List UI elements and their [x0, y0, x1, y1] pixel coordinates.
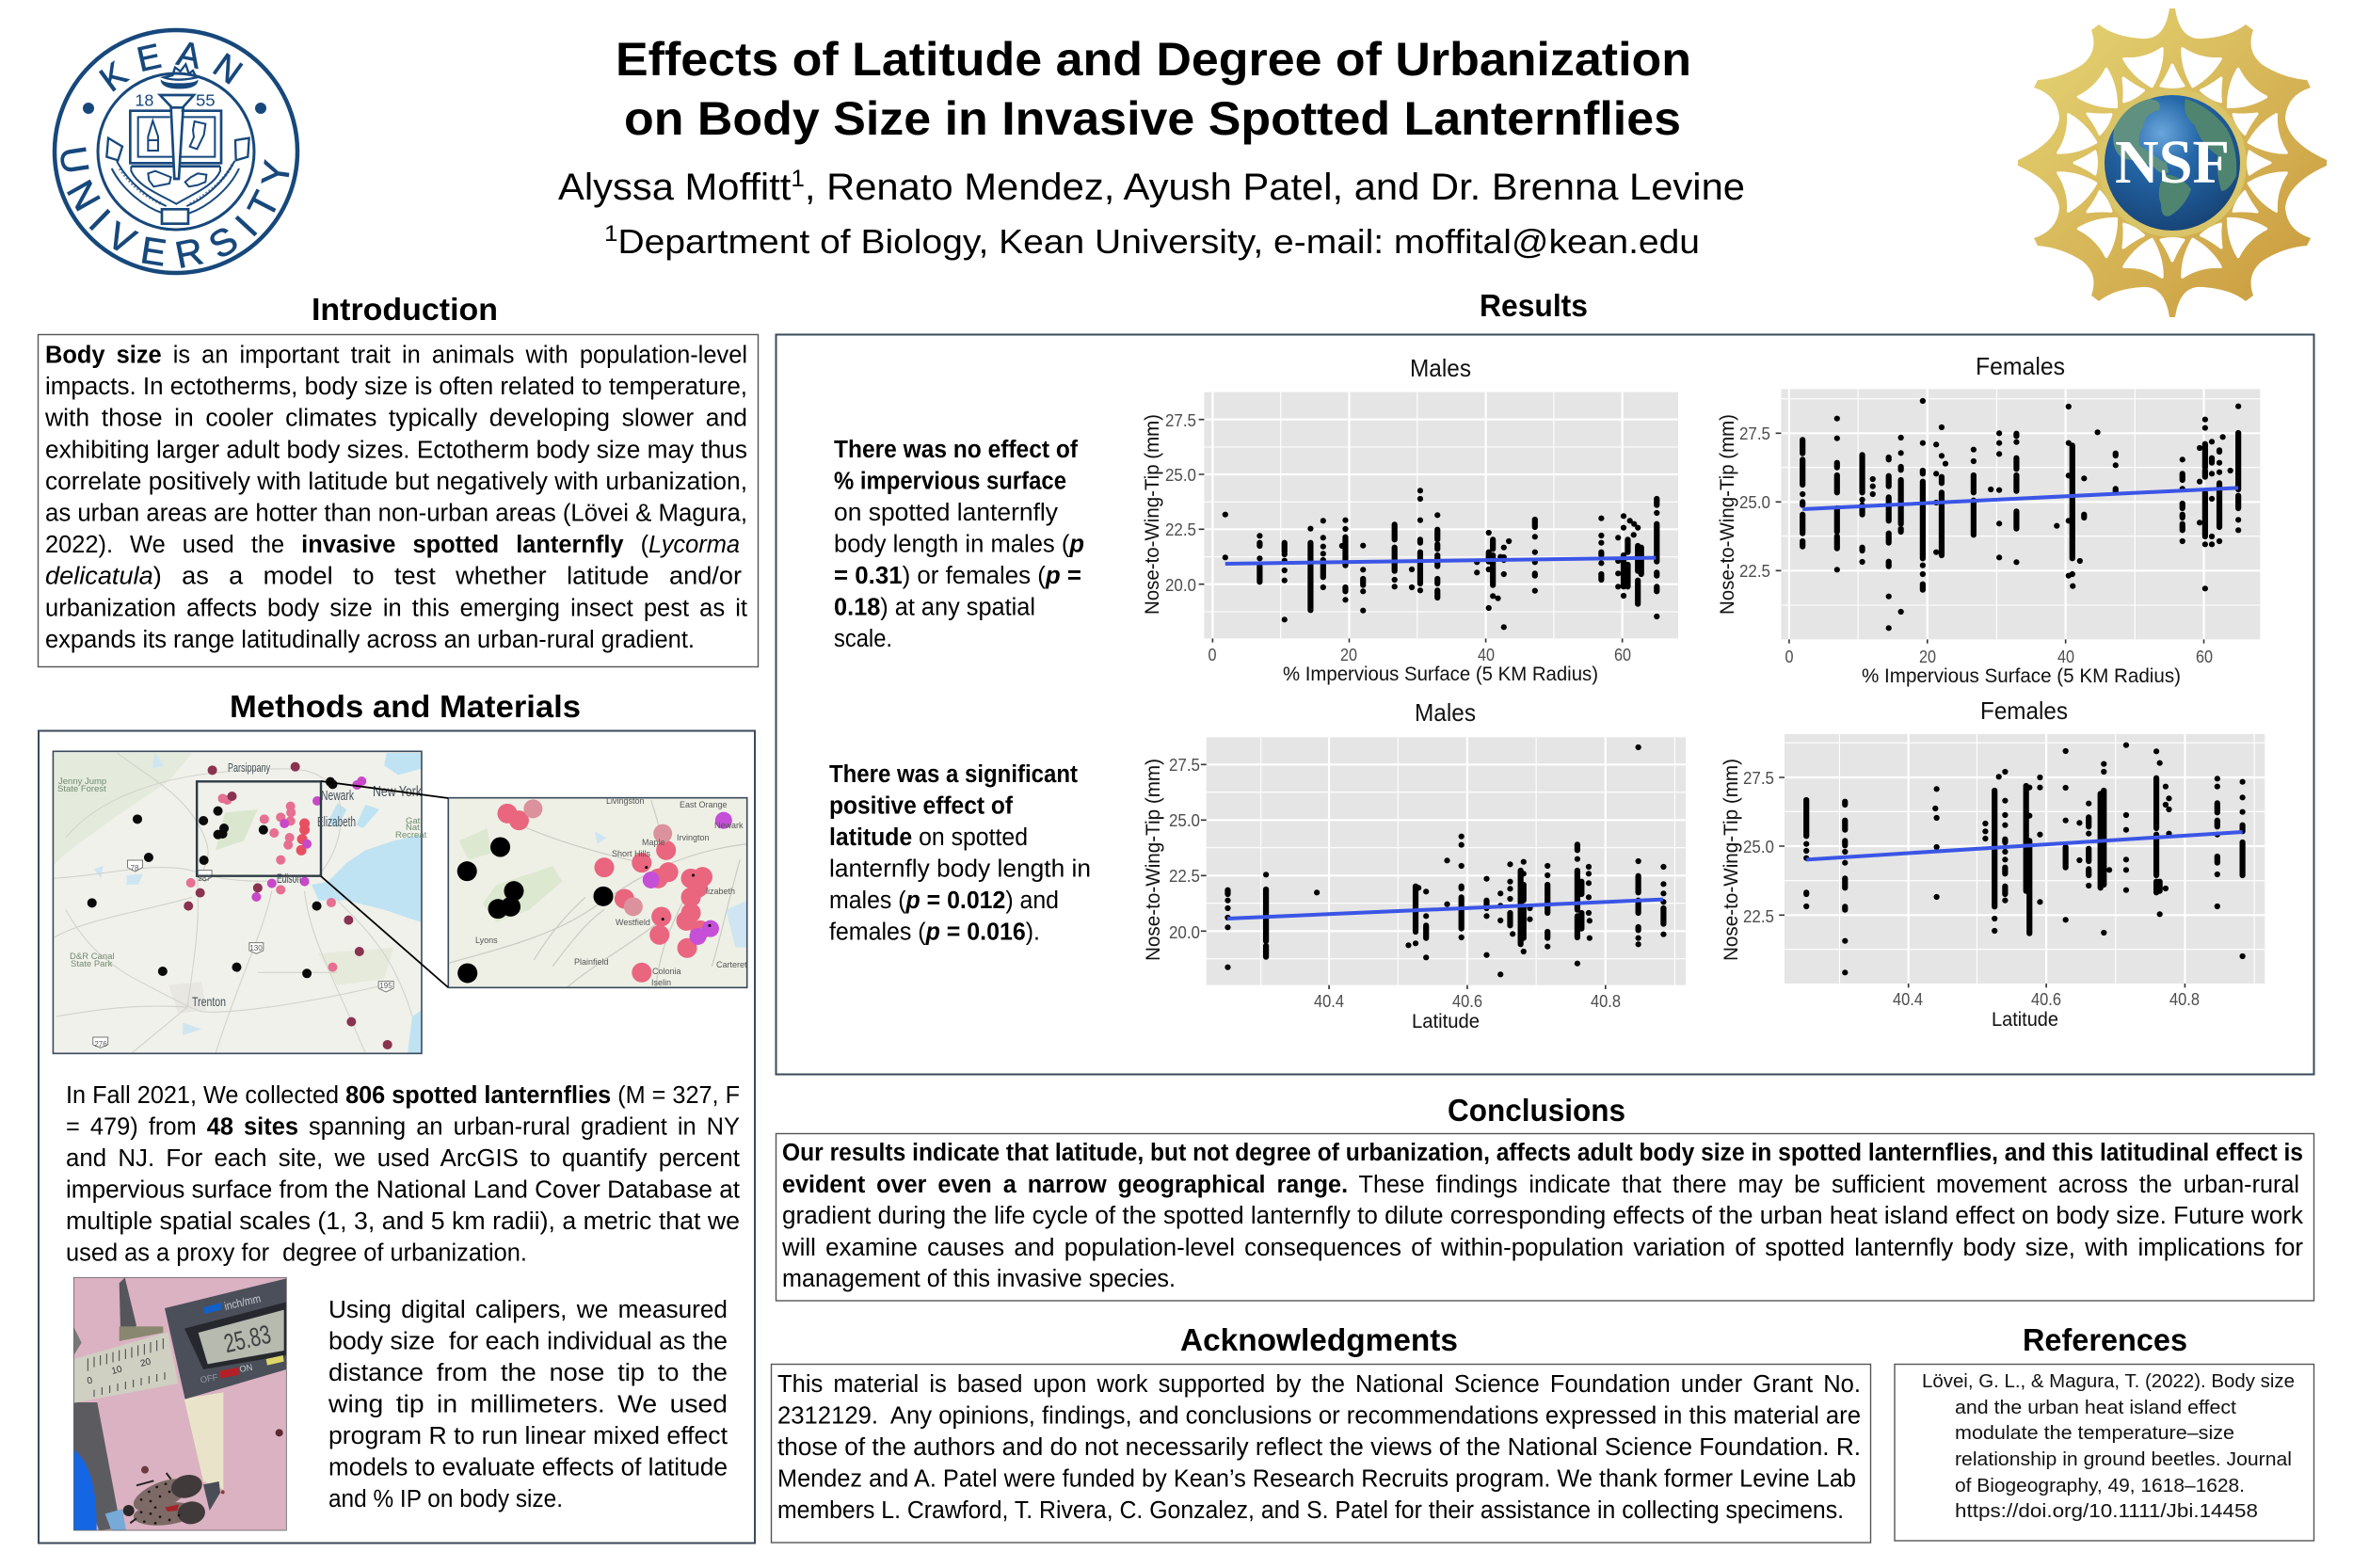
logo: NSF — [2018, 8, 2327, 317]
chart: males body size vs latitude: Males — [1415, 698, 1476, 727]
text: introduction body: impacts. In ectotherms, body size is often related to temperature, — [45, 374, 747, 400]
panel: conclusions — [776, 1133, 2313, 1301]
text: measurement methods: body size for each individual as the — [328, 1329, 728, 1355]
text: measurement methods: program R to run linear mixed effect — [328, 1423, 728, 1449]
map labels: 287 — [198, 874, 211, 883]
inset map labels: Short Hills — [612, 849, 651, 858]
panel: conclusions: Our results indicate that latitude, but not degree of urbanization, affects adult body size in spotted lanternflies, and this latitudinal effect is — [782, 1140, 2303, 1166]
chart: females body size vs latitude: 40.8 — [2169, 990, 2200, 1009]
inset map labels: lizabeth — [706, 887, 735, 896]
map labels: Elizabeth — [317, 814, 356, 830]
map labels: 195 — [379, 982, 392, 990]
photo: digital calipers measuring a lanternfly: 10 — [110, 1364, 123, 1377]
text: latitude finding: lanternfly body length in — [829, 856, 1091, 883]
chart: males body size vs latitude: 22.5 — [1169, 867, 1200, 886]
panel: acknowledgments: Mendez and A. Patel were funded by Kean’s Research Recruits program. We thank former Levine Lab — [777, 1466, 1856, 1493]
text: measurement methods: models to evaluate effects of latitude — [328, 1455, 728, 1481]
inset map labels: Lyons — [475, 936, 498, 945]
photo: digital calipers measuring a lanternfly: inch/mm — [223, 1291, 262, 1313]
chart: females body size vs latitude — [1721, 696, 2265, 1031]
panel: acknowledgments — [772, 1365, 1871, 1543]
map: study sites overview — [53, 751, 422, 1053]
affiliation: 1 — [604, 221, 617, 247]
chart: females body size vs impervious surface: Females — [1976, 352, 2065, 380]
panel: conclusions: evident over even a narrow geographical range. These findings indicate that there may be sufficient movement across the urban-rural — [782, 1172, 2299, 1198]
text: sampling methods: and NJ. For each site, we used ArcGIS to quantify percent — [66, 1145, 740, 1172]
panel: references: modulate the temperature–size — [1955, 1422, 2234, 1444]
panel: references: relationship in ground beetles. Journal — [1955, 1448, 2292, 1470]
panel: methods and materials — [39, 730, 755, 1544]
logo: Kean University seal: 18 — [135, 90, 153, 109]
text: impervious surface finding: % impervious surface — [834, 469, 1066, 495]
map labels: Trenton — [192, 994, 226, 1009]
chart: males body size vs latitude — [1143, 698, 1686, 1032]
panel: introduction — [38, 335, 759, 666]
chart: males body size vs latitude: 40.4 — [1314, 992, 1344, 1011]
panel: acknowledgments: those of the authors and do not necessarily reflect the views of the National Science Foundation. R. — [777, 1434, 1861, 1461]
chart: males body size vs impervious surface: 0 — [1209, 646, 1216, 664]
chart: males body size vs impervious surface: 40 — [1478, 646, 1495, 664]
panel: references — [1895, 1365, 2313, 1541]
inset map labels: Colonia — [652, 967, 681, 976]
map labels: Parsippany — [228, 760, 270, 775]
chart: females body size vs impervious surface: 27.5 — [1739, 424, 1770, 443]
chart: males body size vs impervious surface: 25.0 — [1165, 466, 1196, 485]
title — [616, 33, 1691, 145]
map labels: 130 — [249, 944, 263, 952]
text: latitude finding — [829, 761, 1091, 945]
text: sampling methods: multiple spatial scales (1, 3, and 5 km radii), a metric that we — [66, 1208, 740, 1235]
map labels: Newark — [321, 788, 354, 804]
chart: males body size vs impervious surface: Nose-to-Wing-Tip (mm) — [1142, 414, 1163, 615]
panel: references: of Biogeography, 49, 1618–1628. — [1955, 1475, 2245, 1496]
text: introduction body: with those in cooler climates typically developing slower and — [44, 406, 747, 432]
chart: males body size vs impervious surface: 22.5 — [1165, 520, 1196, 539]
text: measurement methods — [328, 1297, 728, 1512]
photo: digital calipers measuring a lanternfly — [73, 1277, 286, 1530]
map labels: State Forest — [57, 784, 106, 794]
chart: males body size vs latitude: 40.6 — [1452, 992, 1482, 1011]
chart: females body size vs impervious surface: 20 — [1919, 648, 1936, 666]
text: impervious surface finding: 0.18) at any spatial — [834, 595, 1035, 621]
text: sampling methods: = 479) from 48 sites spanning an urban-rural gradient in NY — [66, 1114, 740, 1141]
text: measurement methods: distance from the nose tip to the — [328, 1360, 728, 1386]
inset map labels: Newark — [714, 821, 744, 830]
text: measurement methods: and % IP on body size. — [328, 1486, 563, 1512]
chart: females body size vs impervious surface: 22.5 — [1739, 562, 1770, 581]
panel: references: https://doi.org/10.1111/Jbi.14458 — [1955, 1500, 2258, 1522]
map labels: D&R Canal — [70, 952, 115, 962]
text: impervious surface finding — [834, 437, 1084, 652]
map labels: State Park — [71, 959, 113, 969]
map labels: Nat — [406, 823, 420, 833]
inset map labels: Westfield — [616, 918, 650, 927]
chart: females body size vs impervious surface: % Impervious Surface (5 KM Radius) — [1862, 665, 2181, 687]
logo: Kean University seal — [53, 28, 299, 275]
heading: Introduction: Introduction — [312, 292, 498, 327]
chart: females body size vs impervious surface: 60 — [2196, 648, 2213, 666]
chart: males body size vs impervious surface — [1142, 354, 1678, 685]
chart: males body size vs latitude: 27.5 — [1169, 756, 1200, 775]
logo: Kean University seal: UNIVERSITY — [60, 147, 290, 268]
text: measurement methods: Using digital calipers, we measured — [328, 1297, 728, 1323]
map labels: Recreat — [395, 830, 427, 840]
inset map labels: East Orange — [680, 800, 728, 809]
map labels: Edison — [277, 871, 301, 886]
chart: males body size vs latitude: 25.0 — [1169, 811, 1200, 830]
affiliation: Department of Biology, Kean University, e-mail: moffital@kean.edu — [617, 222, 1700, 261]
text: introduction body: delicatula ) as a model to test whether latitude and/or — [45, 564, 743, 590]
inset map labels: Iselin — [651, 978, 671, 987]
authors: 1 — [791, 166, 805, 192]
map: inset zoom — [448, 798, 747, 987]
text: impervious surface finding: = 0.31) or females (p = — [834, 563, 1081, 589]
logo: Kean University seal: 55 — [196, 90, 216, 109]
photo: digital calipers measuring a lanternfly: OFF — [200, 1372, 218, 1384]
chart: males body size vs latitude: Latitude — [1412, 1011, 1480, 1032]
text: latitude finding: females (p = 0.016). — [829, 919, 1040, 945]
chart: females body size vs latitude: 27.5 — [1743, 769, 1774, 788]
chart: males body size vs impervious surface: 27.5 — [1165, 411, 1196, 430]
chart: females body size vs latitude: 25.0 — [1743, 838, 1774, 856]
chart: males body size vs impervious surface: Males — [1410, 354, 1471, 382]
logo: Kean University seal: KEAN — [98, 41, 243, 92]
chart: females body size vs impervious surface: 0 — [1785, 648, 1794, 666]
text: latitude finding: males (p = 0.012) and — [829, 888, 1059, 914]
chart: females body size vs latitude: 40.4 — [1893, 990, 1923, 1009]
chart: males body size vs latitude: Nose-to-Wing-Tip (mm) — [1143, 759, 1164, 961]
panel: acknowledgments: members L. Crawford, T. Rivera, C. Gonzalez, and S. Patel for their assistance in collecting specimens. — [777, 1497, 1844, 1524]
panel: references: and the urban heat island effect — [1955, 1397, 2236, 1418]
text: introduction body: expands its range latitudinally across an urban-rural gradient. — [45, 627, 695, 653]
text: introduction body: correlate positively with latitude but negatively with urbanization, — [45, 469, 747, 495]
map labels: 78 — [131, 864, 139, 872]
text: introduction body: urbanization affects body size in this emerging insect pest as it — [45, 595, 747, 621]
chart: females body size vs latitude: 22.5 — [1743, 907, 1774, 926]
inset map labels: Irvington — [677, 833, 710, 842]
text: introduction body — [44, 343, 747, 653]
chart: females body size vs impervious surface: 40 — [2057, 648, 2074, 666]
text: sampling methods: impervious surface from the National Land Cover Database at — [66, 1176, 740, 1203]
map labels: 276 — [94, 1040, 107, 1048]
photo: digital calipers measuring a lanternfly: ON — [239, 1363, 253, 1374]
inset map labels: Carteret — [716, 960, 747, 969]
panel: references: Lövei, G. L., & Magura, T. (2022). Body size — [1922, 1370, 2295, 1392]
chart: females body size vs impervious surface: 25.0 — [1739, 493, 1770, 512]
chart: females body size vs impervious surface — [1717, 352, 2260, 687]
connector lines: map to inset — [321, 781, 448, 987]
logo: NSF: NSF — [2115, 128, 2230, 197]
text: impervious surface finding: scale. — [834, 626, 892, 652]
text: impervious surface finding: on spotted lanternfly — [834, 500, 1058, 526]
panel: conclusions: management of this invasive species. — [782, 1266, 1176, 1292]
heading: Methods and Materials: Methods and Materials — [230, 689, 581, 724]
chart: females body size vs latitude: 40.6 — [2031, 990, 2061, 1009]
inset map labels: Livingston — [606, 796, 645, 806]
photo: digital calipers measuring a lanternfly: 0 — [86, 1375, 94, 1387]
map labels — [57, 760, 427, 1048]
text: impervious surface finding: body length in males (p — [834, 531, 1084, 557]
text: latitude finding: There was a significant — [829, 761, 1078, 788]
photo: digital calipers measuring a lanternfly: 20 — [139, 1356, 152, 1369]
chart: males body size vs impervious surface: % Impervious Surface (5 KM Radius) — [1283, 664, 1598, 685]
chart: females body size vs impervious surface: Nose-to-Wing-Tip (mm) — [1717, 414, 1738, 615]
text: introduction body: exhibiting larger adult body sizes. Ectotherm body size may thus — [45, 437, 747, 463]
authors: Alyssa Moffitt — [558, 167, 781, 208]
chart: males body size vs latitude: 40.8 — [1591, 992, 1621, 1011]
panel: conclusions: will examine causes and population-level consequences of within-population variation of spotted lanternfly body size, with implications for — [781, 1235, 2304, 1261]
text: latitude finding: latitude on spotted — [829, 824, 1028, 851]
photo: digital calipers measuring a lanternfly: 25.83 — [221, 1320, 274, 1358]
chart: females body size vs latitude: Nose-to-Wing-Tip (mm) — [1721, 759, 1742, 961]
inset map labels: Plainfield — [574, 957, 609, 967]
map labels: Jenny Jump — [58, 776, 106, 787]
text: introduction body: Body size is an important trait in animals with population-level — [45, 343, 747, 369]
chart: females body size vs latitude: Females — [1980, 696, 2068, 725]
inset map labels: Maple — [642, 838, 665, 847]
text: sampling methods: In Fall 2021, We collected 806 spotted lanternflies (M = 327, F — [66, 1082, 740, 1109]
text: latitude finding: positive effect of — [829, 792, 1013, 819]
inset map labels — [475, 796, 747, 987]
text: impervious surface finding: There was no effect of — [834, 437, 1078, 463]
title: on Body Size in Invasive Spotted Lanternflies — [624, 92, 1681, 145]
map labels: New York — [373, 784, 423, 800]
chart: males body size vs impervious surface: 20.0 — [1165, 576, 1196, 595]
text: sampling methods: used as a proxy for degree of urbanization. — [66, 1240, 527, 1267]
panel: acknowledgments: This material is based upon work supported by the National Science Foundation under Grant No. — [777, 1371, 1861, 1398]
text: measurement methods: wing tip in millimeters. We used — [328, 1391, 728, 1417]
text: sampling methods — [66, 1082, 740, 1267]
authors: , Renato Mendez, Ayush Patel, and Dr. Brenna Levine — [805, 167, 1745, 208]
heading: Conclusions: Conclusions — [1448, 1093, 1625, 1128]
map labels: Gat — [406, 816, 421, 826]
panel: results — [776, 335, 2313, 1075]
heading: References: References — [2023, 1322, 2187, 1357]
text: introduction body: as urban areas are hotter than non-urban areas (Lövei & Magura, — [45, 501, 747, 527]
chart: males body size vs impervious surface: 20 — [1340, 646, 1357, 664]
panel: conclusions: gradient during the life cycle of the spotted lanternfly to dilute corresponding effects of the urban heat island effect on body size. Future work — [782, 1203, 2303, 1229]
heading: Results: Results — [1480, 288, 1588, 323]
heading: Acknowledgments: Acknowledgments — [1180, 1322, 1458, 1357]
title: Effects of Latitude and Degree of Urbanization — [616, 33, 1691, 86]
text: introduction body: 2022). We used the invasive spotted lanternfly (Lycorma — [45, 532, 740, 558]
chart: males body size vs latitude: 20.0 — [1169, 923, 1200, 942]
chart: males body size vs impervious surface: 60 — [1614, 646, 1631, 664]
chart: females body size vs latitude: Latitude — [1992, 1009, 2058, 1031]
panel: acknowledgments: 2312129. Any opinions, findings, and conclusions or recommendations expressed in this material are — [777, 1402, 1861, 1429]
